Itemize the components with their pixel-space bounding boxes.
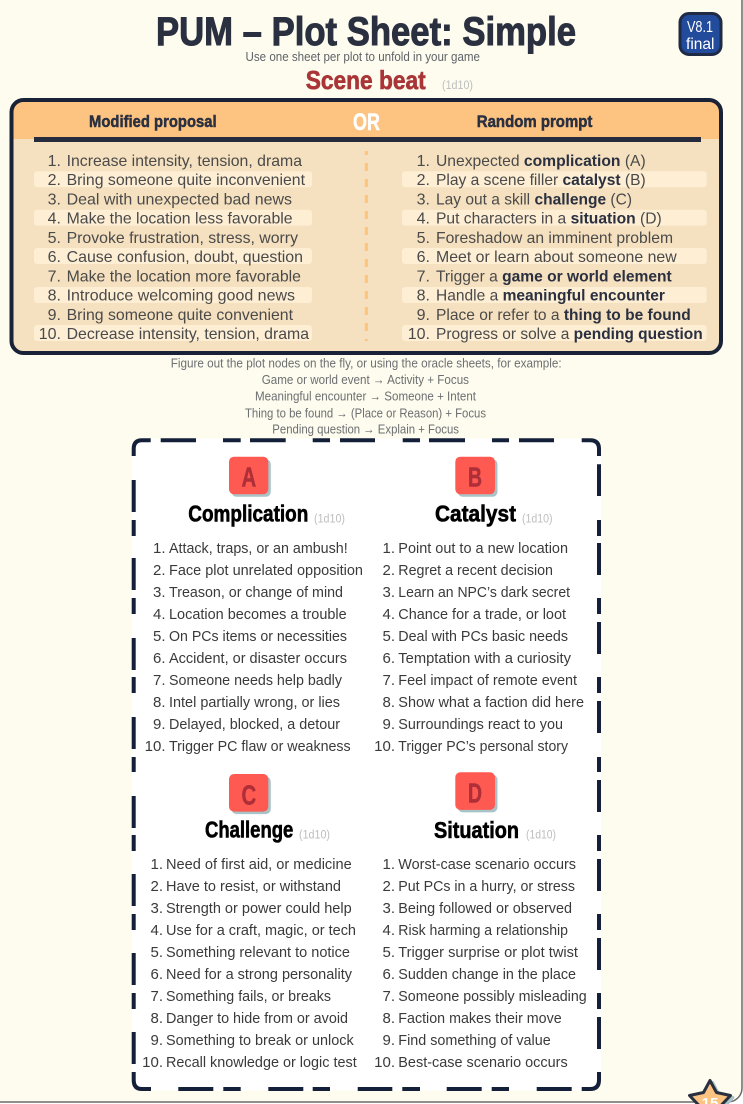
list: modified proposal: 1. xyxy=(48,153,61,170)
list: catalyst: Trigger PC’s personal story xyxy=(398,738,568,755)
list: complication xyxy=(145,540,363,755)
icon: letter D xyxy=(455,772,498,812)
oracle note: Meaningful encounter → Someone + Intent xyxy=(255,389,476,404)
list: random prompt: 4. xyxy=(417,211,430,228)
list: situation: 1. xyxy=(382,856,395,873)
list: situation xyxy=(374,856,587,1071)
icon: letter D: D xyxy=(468,778,482,809)
list: complication: Attack, traps, or an ambush! xyxy=(169,540,348,557)
list: modified proposal: Make the location more favorable xyxy=(67,268,301,285)
list: complication: Treason, or change of mind xyxy=(169,584,343,601)
list: catalyst: Learn an NPC’s dark secret xyxy=(398,584,571,601)
list: modified proposal: 6. xyxy=(48,249,61,266)
list: modified proposal: Bring someone quite inconvenient xyxy=(67,172,306,189)
oracle note xyxy=(171,356,562,437)
list: challenge: Something to break or unlock xyxy=(166,1032,354,1049)
icon: letter B xyxy=(455,457,498,497)
list: modified proposal: Deal with unexpected bad news xyxy=(67,191,292,208)
list: complication: Accident, or disaster occurs xyxy=(169,650,347,667)
list: challenge: 2. xyxy=(150,878,163,895)
panel: scene beat table xyxy=(12,100,721,353)
list: catalyst: Regret a recent decision xyxy=(398,562,553,579)
list: modified proposal: Cause confusion, doubt, question xyxy=(67,249,303,266)
list: challenge: Something relevant to notice xyxy=(166,944,350,961)
list: situation: 2. xyxy=(382,878,395,895)
list: random prompt: 2. xyxy=(417,172,430,189)
list: random prompt: Play a scene filler catalyst (B) xyxy=(436,172,646,189)
list: complication: 2. xyxy=(153,562,166,579)
list: situation: Faction makes their move xyxy=(398,1010,562,1027)
list: situation: 3. xyxy=(382,900,395,917)
list: situation: 7. xyxy=(382,988,395,1005)
list: modified proposal: 7. xyxy=(48,268,61,285)
list: situation: Someone possibly misleading xyxy=(398,988,587,1005)
icon: letter A: A xyxy=(242,462,256,493)
list: complication: Location becomes a trouble xyxy=(169,606,347,623)
list: complication: 9. xyxy=(153,716,166,733)
icon: letter C: C xyxy=(242,779,256,810)
list: modified proposal: 10. xyxy=(39,326,61,343)
list: random prompt: 6. xyxy=(417,249,430,266)
list: complication: 3. xyxy=(153,584,166,601)
list: random prompt: 9. xyxy=(417,307,430,324)
list: modified proposal xyxy=(34,153,312,343)
icon: letter A xyxy=(229,457,271,497)
heading: scene beat: Scene beat xyxy=(306,65,426,95)
list: modified proposal: 8. xyxy=(48,288,61,304)
list: catalyst: 3. xyxy=(382,584,395,601)
list: situation: 9. xyxy=(382,1032,395,1049)
list: complication: 5. xyxy=(153,628,166,645)
list: situation: Put PCs in a hurry, or stress xyxy=(398,878,575,895)
list: random prompt: Handle a meaningful encounter xyxy=(436,288,665,304)
heading: challenge: Challenge xyxy=(205,817,293,843)
table C: challenge xyxy=(142,774,357,1071)
list: catalyst: Feel impact of remote event xyxy=(398,672,578,689)
list: catalyst: 6. xyxy=(382,650,395,667)
list: random prompt: Meet or learn about someone new xyxy=(436,249,677,266)
table B: catalyst xyxy=(374,457,584,755)
list: random prompt: Unexpected complication (A) xyxy=(436,153,646,170)
list: catalyst: 9. xyxy=(382,716,395,733)
list: complication: 10. xyxy=(145,738,166,755)
list: random prompt: 3. xyxy=(417,191,430,208)
list: complication: On PCs items or necessities xyxy=(169,628,347,645)
list: modified proposal: Bring someone quite convenient xyxy=(67,307,294,324)
list: challenge: Danger to hide from or avoid xyxy=(166,1010,348,1027)
list: random prompt xyxy=(402,153,707,343)
list: challenge: Use for a craft, magic, or tech xyxy=(166,922,356,939)
list: complication: 7. xyxy=(153,672,166,689)
list: situation: Worst-case scenario occurs xyxy=(398,856,576,873)
list: catalyst: 5. xyxy=(382,628,395,645)
list: challenge: 10. xyxy=(142,1054,163,1071)
list: catalyst: Surroundings react to you xyxy=(398,716,563,733)
version badge: final xyxy=(686,36,714,53)
list: challenge: 7. xyxy=(150,988,163,1005)
list: situation: 10. xyxy=(374,1054,395,1071)
list: catalyst: 8. xyxy=(382,694,395,711)
list: modified proposal: Increase intensity, tension, drama xyxy=(67,153,302,170)
list: modified proposal: 5. xyxy=(48,230,61,247)
list: modified proposal: Make the location less favorable xyxy=(67,211,293,228)
icon: letter B: B xyxy=(468,462,482,493)
list: catalyst: 4. xyxy=(382,606,395,623)
heading: catalyst: Catalyst xyxy=(435,501,516,527)
list: complication: Trigger PC flaw or weakness xyxy=(169,738,351,755)
list: situation: Being followed or observed xyxy=(398,900,572,917)
list: situation: 8. xyxy=(382,1010,395,1027)
version badge xyxy=(680,14,721,54)
list: challenge: 6. xyxy=(150,966,163,983)
oracle note: Thing to be found → (Place or Reason) + Focus xyxy=(245,405,486,420)
list: challenge: 9. xyxy=(150,1032,163,1049)
column heading: random prompt: Random prompt xyxy=(477,112,593,131)
list: complication: 4. xyxy=(153,606,166,623)
list: modified proposal: 4. xyxy=(48,211,61,228)
title: PUM – Plot Sheet: Simple xyxy=(156,10,576,54)
list: complication: 6. xyxy=(153,650,166,667)
list: random prompt: Trigger a game or world element xyxy=(436,268,672,285)
list: situation: 4. xyxy=(382,922,395,939)
list: complication: 1. xyxy=(153,540,166,557)
list: challenge: 1. xyxy=(150,856,163,873)
icon: page number star xyxy=(690,1080,733,1104)
list: situation: Sudden change in the place xyxy=(398,966,576,983)
list: catalyst: Show what a faction did here xyxy=(398,694,584,711)
list: catalyst: Temptation with a curiosity xyxy=(398,650,571,667)
list: random prompt: Foreshadow an imminent problem xyxy=(436,230,673,247)
list: challenge: 8. xyxy=(150,1010,163,1027)
list: situation: Risk harming a relationship xyxy=(398,922,568,939)
list: complication: Delayed, blocked, a detour xyxy=(169,716,340,733)
dice note: (1d10) xyxy=(299,830,330,842)
version badge: V8.1 xyxy=(687,19,713,36)
heading: scene beat: (1d10) xyxy=(442,80,473,92)
heading: complication: Complication xyxy=(188,501,308,527)
oracle note: Game or world event → Activity + Focus xyxy=(262,372,469,387)
list: situation: Best-case scenario occurs xyxy=(398,1054,568,1071)
list: challenge: 5. xyxy=(150,944,163,961)
list: situation: 5. xyxy=(382,944,395,961)
dice note: (1d10) xyxy=(314,514,345,526)
dice note: (1d10) xyxy=(526,830,556,842)
list: catalyst: 7. xyxy=(382,672,395,689)
list: catalyst: 10. xyxy=(374,738,395,755)
list: random prompt: Lay out a skill challenge (C) xyxy=(436,191,632,208)
list: modified proposal: Introduce welcoming good news xyxy=(67,288,295,304)
list: modified proposal: 3. xyxy=(48,191,61,208)
icon: letter C xyxy=(229,774,271,814)
list: catalyst: Chance for a trade, or loot xyxy=(398,606,567,623)
list: situation: Find something of value xyxy=(398,1032,551,1049)
list: random prompt: 10. xyxy=(408,326,430,343)
OR label: OR xyxy=(353,109,380,136)
column heading: modified proposal: Modified proposal xyxy=(89,112,217,131)
list: complication: Face plot unrelated opposition xyxy=(169,562,363,579)
list: challenge: 4. xyxy=(150,922,163,939)
list: catalyst xyxy=(374,540,584,755)
list: challenge: Need of first aid, or medicine xyxy=(166,856,352,873)
dice note: (1d10) xyxy=(522,514,553,526)
list: random prompt: Put characters in a situation (D) xyxy=(436,211,662,228)
list: modified proposal: Decrease intensity, tension, drama xyxy=(67,326,309,343)
list: challenge: Need for a strong personality xyxy=(166,966,352,983)
list: random prompt: 1. xyxy=(417,153,430,170)
list: challenge: Have to resist, or withstand xyxy=(166,878,341,895)
list: random prompt: 8. xyxy=(417,288,430,304)
list: modified proposal: 2. xyxy=(48,172,61,189)
list: challenge: Something fails, or breaks xyxy=(166,988,331,1005)
list: random prompt: 5. xyxy=(417,230,430,247)
list: catalyst: Deal with PCs basic needs xyxy=(398,628,568,645)
list: challenge xyxy=(142,856,357,1071)
list: random prompt: Place or refer to a thing to be found xyxy=(436,307,691,324)
list: catalyst: Point out to a new location xyxy=(398,540,568,557)
list: random prompt: Progress or solve a pending question xyxy=(436,326,703,343)
list: complication: Someone needs help badly xyxy=(169,672,342,689)
panel: detail tables xyxy=(132,438,601,1090)
table D: situation xyxy=(374,772,587,1071)
table A: complication xyxy=(145,457,363,755)
oracle note: Figure out the plot nodes on the fly, or using the oracle sheets, for example: xyxy=(171,356,562,371)
list: complication: 8. xyxy=(153,694,166,711)
list: situation: 6. xyxy=(382,966,395,983)
list: challenge: Strength or power could help xyxy=(166,900,352,917)
subtitle: Use one sheet per plot to unfold in your game xyxy=(246,49,480,64)
list: catalyst: 2. xyxy=(382,562,395,579)
list: modified proposal: Provoke frustration, stress, worry xyxy=(67,230,298,247)
list: random prompt: 7. xyxy=(417,268,430,285)
list: challenge: 3. xyxy=(150,900,163,917)
list: complication: Intel partially wrong, or lies xyxy=(169,694,340,711)
heading: situation: Situation xyxy=(434,817,519,843)
list: catalyst: 1. xyxy=(382,540,395,557)
list: modified proposal: 9. xyxy=(48,307,61,324)
list: challenge: Recall knowledge or logic test xyxy=(166,1054,357,1071)
oracle note: Pending question → Explain + Focus xyxy=(272,422,459,437)
list: situation: Trigger surprise or plot twist xyxy=(398,944,579,961)
